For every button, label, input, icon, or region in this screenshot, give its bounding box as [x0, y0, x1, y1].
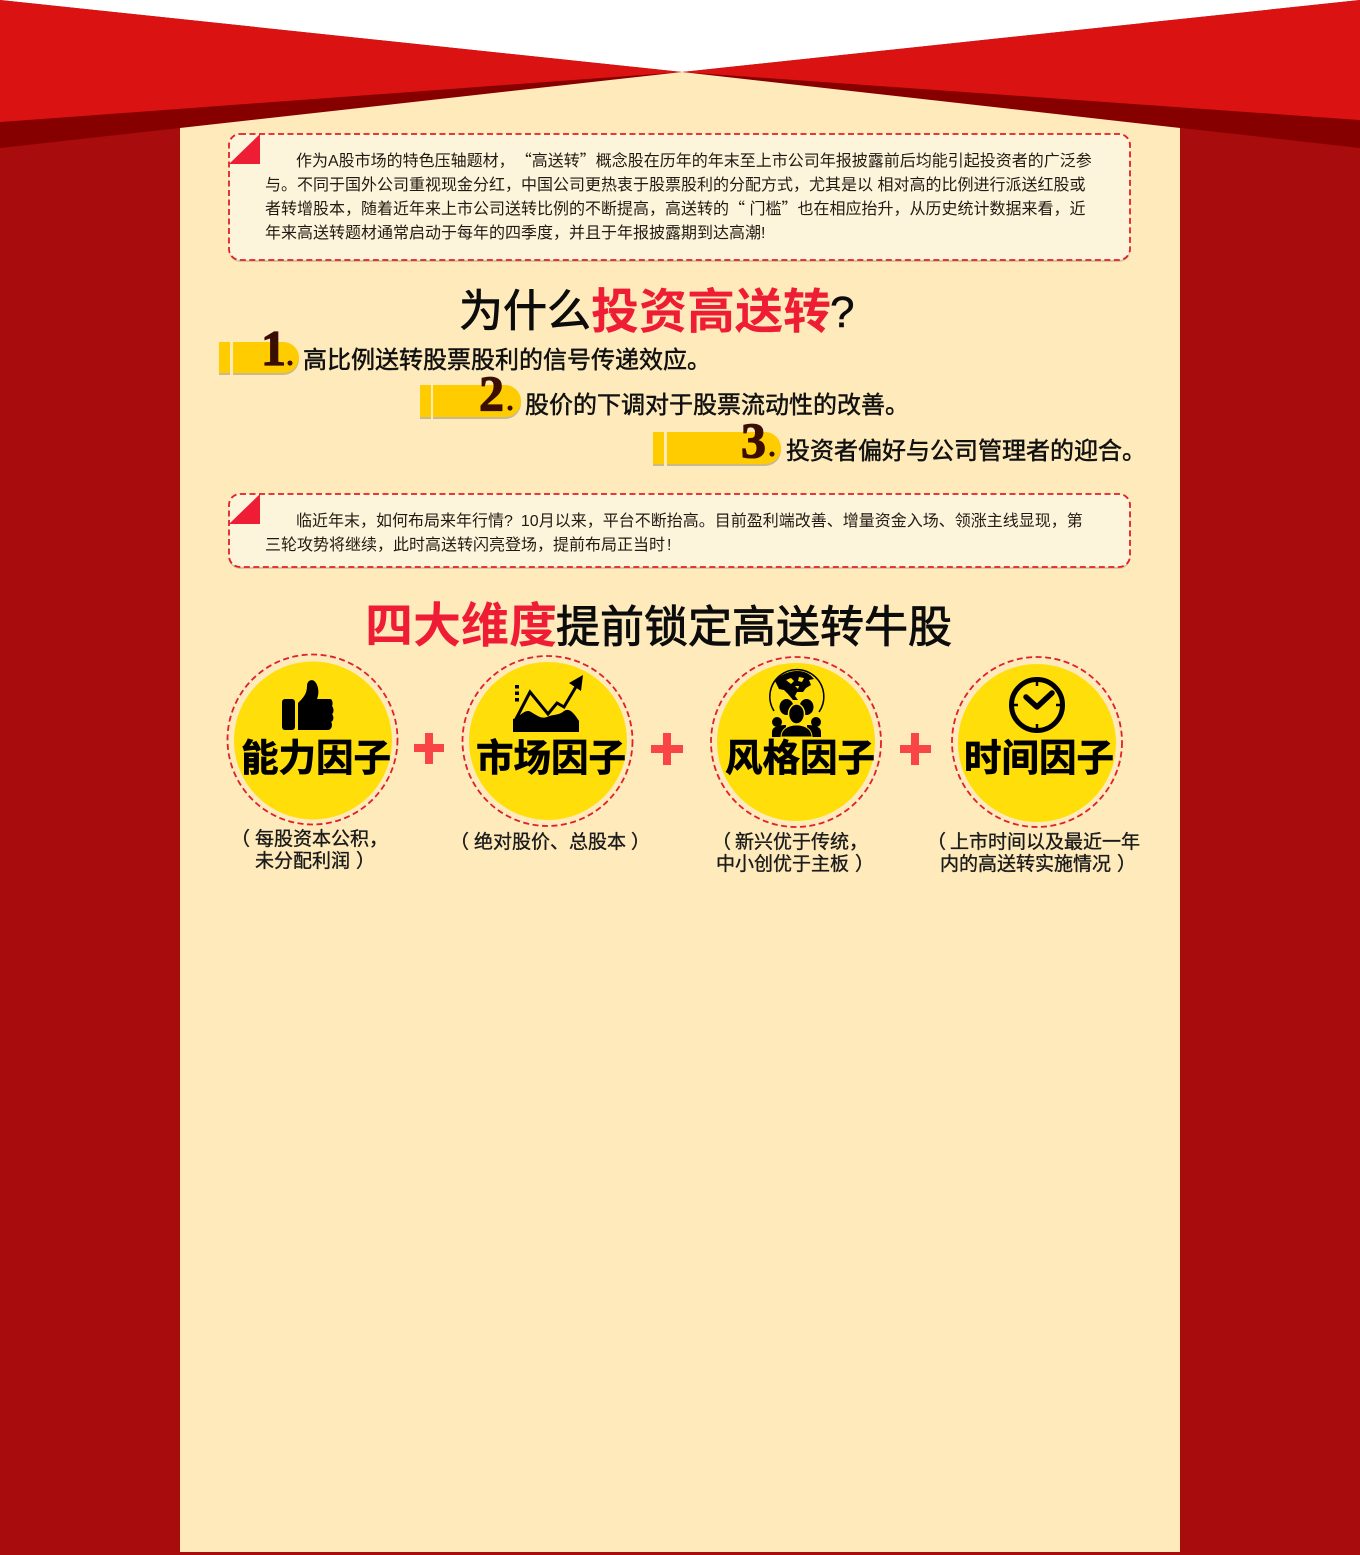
- factor: time: 时间因子: [964, 737, 1114, 779]
- factor: ability: [228, 654, 398, 872]
- icon: globe and people: [770, 670, 824, 737]
- callout: year-end text box: 三轮攻势将继续，此时高送转闪亮登场，提前布局正当时!: [265, 536, 671, 554]
- factor: style: [711, 657, 881, 875]
- factor: style: 风格因子: [725, 737, 875, 779]
- reason 1: 高比例送转股票股利的信号传递效应。: [303, 347, 711, 374]
- callout: intro text box: 者转增股本，随着近年来上市公司送转比例的不断提高，高送转的“ 门槛”也在相应抬升，从历史统计数据来看，近: [265, 195, 1086, 219]
- icon: thumbs up: [282, 680, 334, 730]
- factor: market: 绝对股价、总股本: [474, 831, 626, 853]
- heading: why invest: ?: [830, 288, 854, 337]
- factor: market: （: [450, 832, 469, 853]
- callout: intro text box: 年来高送转题材通常启动于每年的四季度，并且于年报披露期到达高潮!: [265, 224, 765, 242]
- reason 2: [420, 365, 909, 421]
- heading: four dimensions: 四大维度: [365, 600, 557, 653]
- factor: time: （: [927, 832, 946, 853]
- icon: market chart: [513, 675, 583, 732]
- reason 1: .: [287, 345, 293, 371]
- heading: four dimensions: 提前锁定高送转牛股: [556, 603, 952, 652]
- factor: market: ）: [631, 831, 650, 853]
- icon: clock: [1012, 680, 1062, 730]
- callout: year-end text box: [229, 494, 1130, 569]
- callout: intro text box: [229, 134, 1130, 262]
- reason 1: 1: [261, 320, 286, 376]
- factor: time: 内的高送转实施情况 ）: [940, 853, 1136, 875]
- reason 2: 2: [479, 365, 504, 421]
- factor: time: [927, 657, 1140, 875]
- reason 1: [219, 320, 711, 376]
- factor: market: 市场因子: [476, 737, 626, 779]
- reason 3: .: [769, 436, 775, 462]
- callout: year-end text box: 临近年末，如何布局来年行情? 10月以来，平台不断抬高。目前盈利端改善、增量资金入场、领涨主线显现，第: [296, 512, 1083, 530]
- plus sign 2: [651, 733, 683, 765]
- plus sign 1: [414, 733, 444, 764]
- callout: intro text box: 作为A股市场的特色压轴题材， “高送转”概念股在历年的年末至上市公司年报披露前后均能引起投资者的广泛参: [296, 147, 1092, 171]
- reason 3: 3: [741, 412, 766, 468]
- plus sign 3: [900, 733, 931, 765]
- heading: why invest: 为什么: [459, 287, 591, 336]
- factor: time: 上市时间以及最近一年: [950, 831, 1140, 853]
- reason 2: 股价的下调对于股票流动性的改善。: [525, 392, 909, 419]
- factor: style: 中小创优于主板 ）: [716, 853, 874, 875]
- factor: style: （: [712, 832, 731, 853]
- heading: why invest: 投资高送转: [591, 286, 831, 339]
- factor: ability: （: [231, 829, 250, 850]
- callout: intro text box: 与。不同于国外公司重视现金分红，中国公司更热衷于股票股利的分配方式，尤其是以 相对高的比例进行派送红股或: [265, 176, 1085, 194]
- factor: ability: 每股资本公积，: [255, 828, 388, 850]
- factor: ability: 未分配利润 ）: [255, 850, 375, 872]
- factor: market: [450, 656, 650, 853]
- factor: style: 新兴优于传统，: [735, 831, 868, 853]
- factor: ability: 能力因子: [241, 737, 391, 779]
- reason 2: .: [507, 390, 513, 416]
- panel: cream background: [180, 72, 1180, 1552]
- reason 3: 投资者偏好与公司管理者的迎合。: [786, 438, 1146, 465]
- reason 3: [653, 412, 1146, 468]
- ribbon: top banner: [0, 0, 1360, 148]
